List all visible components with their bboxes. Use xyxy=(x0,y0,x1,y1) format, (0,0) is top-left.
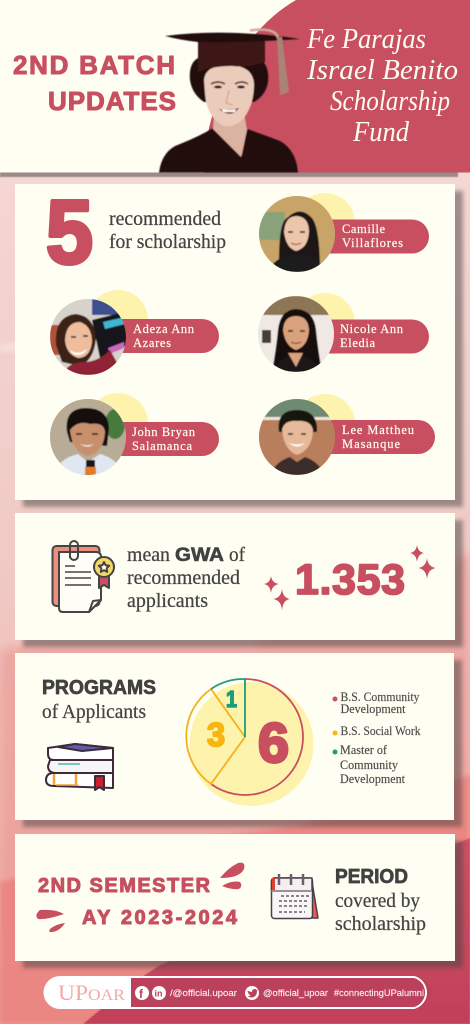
icon: stack of books xyxy=(46,744,113,790)
programs heading: of Applicants xyxy=(42,701,146,723)
period description: scholarship xyxy=(335,913,426,935)
header red shape xyxy=(204,0,470,172)
recommended text: recommended xyxy=(109,208,221,230)
facebook handle: /@official.upoar xyxy=(170,988,237,999)
scholar: Nicole Ann Eledia: Nicole Ann xyxy=(340,322,404,336)
scholar: Nicole Ann Eledia xyxy=(258,293,429,372)
legend: B.S. Social Work xyxy=(340,723,421,738)
icon: sparkles xyxy=(264,545,436,610)
logo: UPoar xyxy=(58,980,125,1005)
semester text: AY 2023-2024 xyxy=(82,907,238,929)
legend: Community xyxy=(340,757,398,772)
header shadow xyxy=(0,171,458,177)
scholar: John Bryan Salamanca xyxy=(50,393,219,476)
legend: B.S. Community xyxy=(340,689,420,704)
programs heading xyxy=(42,677,156,723)
GWA value: 1.353 xyxy=(295,556,405,604)
scholar: John Bryan Salamanca: John Bryan xyxy=(132,425,196,439)
recommended text: for scholarship xyxy=(109,231,226,253)
recommended text xyxy=(109,208,226,253)
big number 5: 5 xyxy=(46,183,93,283)
period description: covered by xyxy=(335,890,421,912)
legend xyxy=(332,689,421,786)
icon: facebook xyxy=(135,986,149,1001)
panel: programs of applicants xyxy=(15,653,462,827)
pie chart: programs xyxy=(186,679,314,806)
legend: Development xyxy=(340,771,405,786)
GWA description: applicants xyxy=(127,590,208,612)
title: 2nd batch updates xyxy=(13,50,176,116)
GWA description xyxy=(127,544,245,612)
GWA description: GWA xyxy=(175,545,224,566)
twitter handle: @official_upoar xyxy=(263,988,328,999)
scholar: Camille Villaflores: Villaflores xyxy=(342,236,403,250)
scholar: Lee Mattheu Masanque: Lee Mattheu xyxy=(342,423,415,437)
scholar: Lee Mattheu Masanque: Masanque xyxy=(342,437,400,451)
title: 2nd batch updates: 2ND BATCH xyxy=(13,50,175,80)
period description: PERIOD xyxy=(335,866,408,888)
title: 2nd batch updates: UPDATES xyxy=(48,86,176,116)
scholar: Adeza Ann Azares: Adeza Ann xyxy=(133,322,195,336)
portrait of Fe Parajas Israel Benito xyxy=(159,30,300,173)
icon: linkedin xyxy=(152,986,166,1000)
icon: calendar xyxy=(272,874,318,918)
icon: certificate document xyxy=(52,541,114,612)
scholar: Camille Villaflores xyxy=(259,193,429,272)
GWA description: recommended xyxy=(127,567,240,589)
icon: linkedin: in xyxy=(154,988,162,998)
icon: twitter xyxy=(245,986,259,1000)
scholar: Adeza Ann Azares: Azares xyxy=(133,336,171,350)
logo: UPoar: OAR xyxy=(88,987,125,1004)
scholar: Camille Villaflores: Camille xyxy=(342,222,385,236)
legend: Development xyxy=(340,701,406,716)
fund name: Israel Benito xyxy=(306,54,458,86)
scholar: Nicole Ann Eledia: Eledia xyxy=(340,336,375,350)
icon: facebook: f xyxy=(139,987,144,1001)
scholar: Lee Mattheu Masanque xyxy=(259,394,435,475)
fund name: Fund xyxy=(352,116,409,148)
panel: mean GWA xyxy=(15,513,463,647)
programs heading: PROGRAMS xyxy=(42,677,156,699)
header banner xyxy=(0,0,470,172)
scholar: Adeza Ann Azares xyxy=(50,290,219,375)
semester text xyxy=(38,875,238,929)
fund name: Scholarship xyxy=(330,85,450,117)
decorative drops xyxy=(36,863,244,932)
pie chart: programs: 6 xyxy=(258,711,289,774)
scholar: John Bryan Salamanca: Salamanca xyxy=(132,439,192,453)
GWA description: mean xyxy=(127,544,170,566)
hashtag: #connectingUPalumni xyxy=(334,988,424,999)
fund name xyxy=(306,23,458,148)
legend: Master of xyxy=(340,742,388,757)
panel: recommended scholars xyxy=(15,183,463,507)
pie chart: programs: 3 xyxy=(207,716,225,753)
logo: UPoar: UP xyxy=(58,980,88,1005)
pie chart: programs: 1 xyxy=(226,686,237,712)
semester text: 2ND SEMESTER xyxy=(38,875,211,897)
GWA description: of xyxy=(229,544,245,566)
fund name: Fe Parajas xyxy=(306,23,426,55)
period description xyxy=(335,866,426,935)
panel: period covered xyxy=(15,834,463,968)
footer bar xyxy=(44,976,430,1009)
